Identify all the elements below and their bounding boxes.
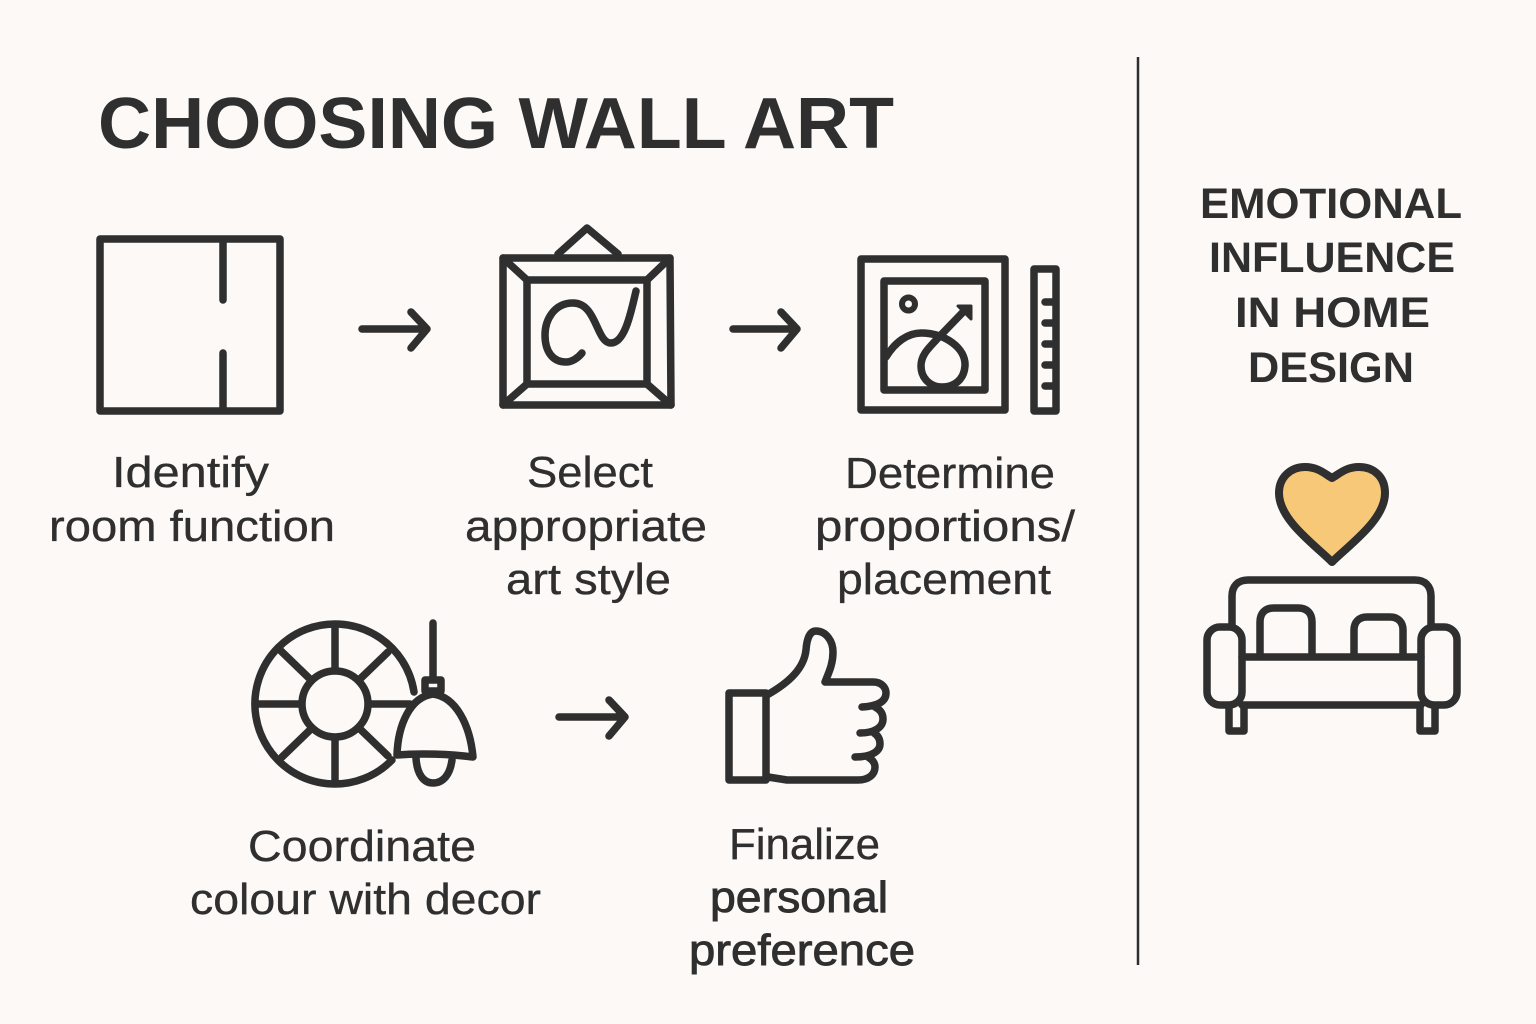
label: coordinate colour with decor: Coordinate (248, 822, 476, 871)
label: determine proportions placement: proportions/ (815, 502, 1076, 551)
arrow: style to placement (733, 312, 797, 348)
label: determine proportions placement: placement (837, 555, 1051, 604)
icon: heart (1279, 467, 1385, 562)
label: determine proportions placement (815, 449, 1076, 604)
label: coordinate colour with decor: colour with decor (190, 875, 541, 924)
icon: colour wheel and pendant lamp (255, 623, 473, 784)
title: CHOOSING WALL ART (98, 84, 894, 164)
label: determine proportions placement: Determine (845, 449, 1055, 498)
heading: emotional influence in home design: IN HOME (1235, 289, 1430, 337)
label: select appropriate art style: art style (506, 555, 671, 604)
label: coordinate colour with decor (190, 822, 541, 924)
arrow: room to style (362, 312, 427, 348)
label: finalize personal preference (689, 820, 915, 975)
icon: room floor plan (100, 239, 280, 411)
label: finalize personal preference: personal (710, 873, 888, 922)
heading: emotional influence in home design: EMOTIONAL (1200, 180, 1462, 228)
icon: sofa (1207, 580, 1457, 731)
label: identify room function (49, 448, 335, 551)
icon: picture with ruler (861, 259, 1056, 411)
arrow: colour to preference (559, 700, 625, 736)
label: identify room function: Identify (112, 448, 269, 497)
label: finalize personal preference: Finalize (729, 820, 880, 869)
label: finalize personal preference: preference (689, 926, 915, 975)
label: select appropriate art style: Select (527, 448, 653, 497)
label: identify room function: room function (49, 502, 335, 551)
label: select appropriate art style (465, 448, 707, 604)
heading: emotional influence in home design: INFLUENCE (1209, 234, 1455, 282)
icon: framed art (503, 228, 671, 405)
heading: emotional influence in home design (1200, 180, 1462, 392)
icon: thumbs up (729, 631, 886, 780)
label: select appropriate art style: appropriate (465, 502, 707, 551)
heading: emotional influence in home design: DESIGN (1248, 344, 1414, 392)
